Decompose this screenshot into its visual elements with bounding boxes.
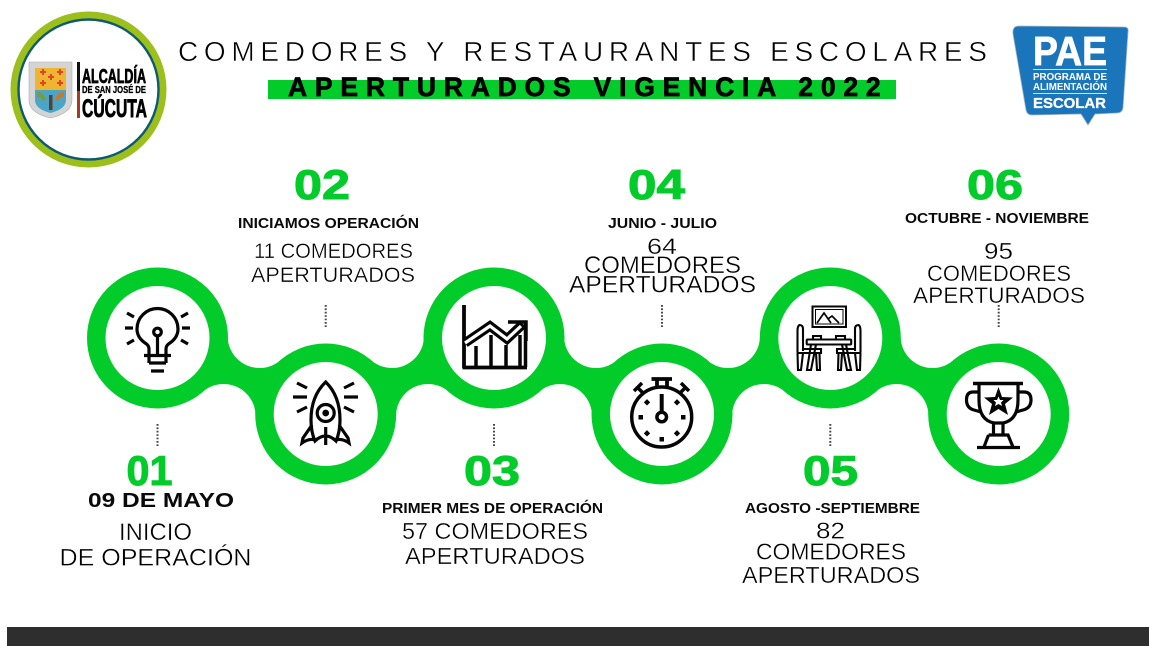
logo: Alcaldía de San José de Cúcuta: CÚCUTA xyxy=(82,93,147,123)
logo: PAE xyxy=(1013,26,1128,125)
title: COMEDORES Y RESTAURANTES ESCOLARES xyxy=(178,36,993,67)
logo: PAE: ESCOLAR xyxy=(1033,95,1106,112)
step 06: OCTUBRE - NOVIEMBRE xyxy=(905,211,1089,227)
step 02: 02 xyxy=(294,161,350,208)
step 01 xyxy=(60,424,252,572)
logo: Alcaldía de San José de Cúcuta: DE SAN JOSÉ DE xyxy=(82,83,146,96)
logo: PAE: PAE xyxy=(1033,28,1107,74)
subtitle with green highlight: APERTURADOS VIGENCIA 2022 xyxy=(288,72,888,102)
step 03: APERTURADOS xyxy=(405,543,585,569)
step 05 xyxy=(742,424,920,588)
logo: Alcaldía de San José de Cúcuta: ALCALDÍA xyxy=(82,65,146,88)
step 06: 95 xyxy=(984,238,1013,264)
icon: trophy xyxy=(966,384,1031,448)
step 04: 64 xyxy=(647,234,677,259)
step 02: INICIAMOS OPERACIÓN xyxy=(238,214,419,232)
step 01: 09 DE MAYO xyxy=(88,489,234,512)
logo: PAE: PROGRAMA DE xyxy=(1033,72,1107,83)
icon: growth chart xyxy=(462,305,527,368)
step 02: APERTURADOS xyxy=(251,264,415,287)
icon: stopwatch xyxy=(632,379,692,447)
step 05: AGOSTO -SEPTIEMBRE xyxy=(745,501,920,517)
step 05: 82 xyxy=(816,518,845,544)
step 06 xyxy=(905,161,1089,327)
step 02 xyxy=(238,161,419,327)
timeline: green chain of circles xyxy=(96,277,1060,475)
step 06: 06 xyxy=(967,161,1023,208)
icon: lightbulb xyxy=(125,309,190,371)
step 01: INICIO xyxy=(119,519,192,546)
logo: Alcaldía de San José de Cúcuta xyxy=(10,12,166,168)
logo: PAE: ALIMENTACIÓN xyxy=(1033,80,1107,93)
step 01: 01 xyxy=(126,447,172,494)
step 04: APERTURADOS xyxy=(569,272,756,298)
step 05: APERTURADOS xyxy=(742,562,920,588)
icon: dining room xyxy=(798,306,860,370)
step 06: COMEDORES xyxy=(927,261,1071,286)
step 02: 11 COMEDORES xyxy=(254,240,413,263)
step 06: APERTURADOS xyxy=(913,283,1085,308)
step 01: DE OPERACIÓN xyxy=(60,544,252,572)
step 03 xyxy=(382,424,603,569)
step 04: 04 xyxy=(628,161,686,208)
step 03: PRIMER MES DE OPERACIÓN xyxy=(382,499,603,517)
icon: rocket xyxy=(293,382,358,445)
step 04: JUNIO - JULIO xyxy=(608,216,717,232)
step 05: 05 xyxy=(803,447,858,494)
step 03: 57 COMEDORES xyxy=(402,518,588,544)
step 04: COMEDORES xyxy=(584,252,741,279)
step 03: 03 xyxy=(464,447,520,494)
step 05: COMEDORES xyxy=(756,538,906,564)
footer bar xyxy=(7,627,1149,646)
step 04 xyxy=(569,161,756,327)
